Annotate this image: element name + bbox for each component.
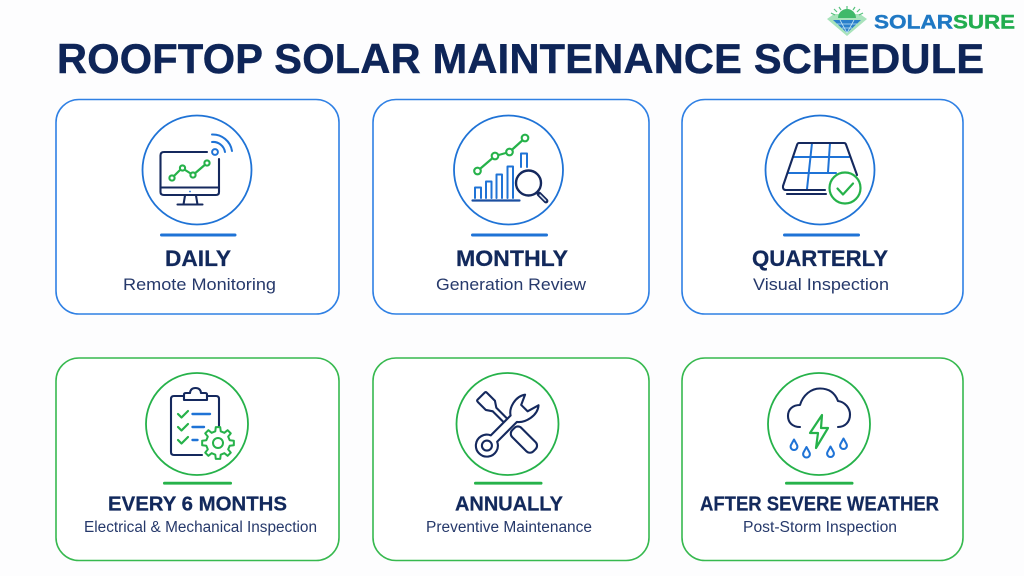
subtitle: Generation Review <box>436 276 586 294</box>
heading: ANNUALLY <box>455 492 563 516</box>
heading: DAILY <box>165 246 231 271</box>
icon: bar chart with magnifier <box>454 116 563 224</box>
panel: monthly <box>373 100 649 314</box>
subtitle: Preventive Maintenance <box>426 519 592 536</box>
subtitle: Remote Monitoring <box>123 276 276 294</box>
panel: annually <box>373 358 649 560</box>
icon: crossed wrench and screwdriver <box>456 373 558 475</box>
icon: sun over solar panel <box>827 6 867 36</box>
accent bar <box>785 482 854 485</box>
heading: MONTHLY <box>456 246 568 271</box>
heading: EVERY 6 MONTHS <box>108 492 287 516</box>
heading: QUARTERLY <box>752 246 888 271</box>
heading: AFTER SEVERE WEATHER <box>700 492 939 516</box>
panel: daily <box>56 100 339 314</box>
subtitle: Visual Inspection <box>753 276 889 294</box>
icon: storm cloud with bolt and rain <box>768 373 870 475</box>
subtitle: Post-Storm Inspection <box>743 519 897 536</box>
panel: every 6 months <box>56 358 339 560</box>
title: ROOFTOP SOLAR MAINTENANCE SCHEDULE <box>57 35 984 82</box>
panel: after severe weather <box>682 358 963 560</box>
icon: solar panel with check <box>766 116 874 224</box>
subtitle: Electrical & Mechanical Inspection <box>84 519 317 536</box>
icon: clipboard with gear <box>146 373 248 475</box>
accent bar <box>471 234 548 236</box>
panel: quarterly <box>682 100 963 314</box>
logo: SolarSure <box>827 6 1015 36</box>
accent bar <box>160 234 236 236</box>
accent bar <box>783 234 860 236</box>
logo wordmark: SOLAR <box>874 12 953 34</box>
accent bar <box>474 482 542 485</box>
accent bar <box>163 482 232 485</box>
logo wordmark: SURE <box>953 12 1015 34</box>
icon: monitor with chart and wifi <box>142 116 252 224</box>
